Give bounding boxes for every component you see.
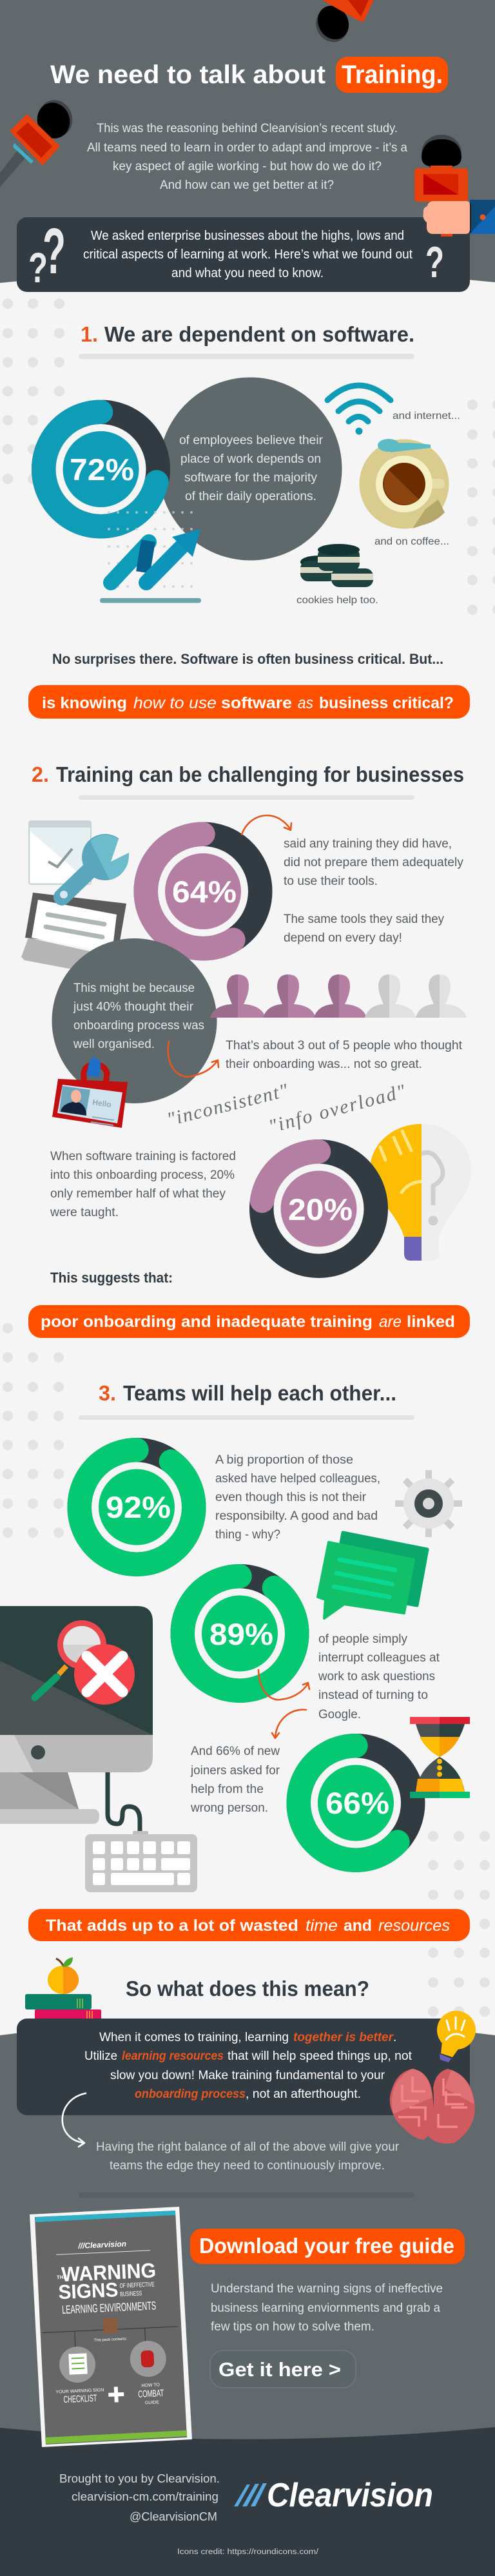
panel: conclusion box: . bbox=[393, 2031, 396, 2044]
heading: so what does this mean: So what does this mean? bbox=[126, 1977, 369, 2000]
text: software training onboarding: into this onboarding process, 20% bbox=[50, 1168, 235, 1182]
callout: business critical question: software bbox=[221, 694, 292, 712]
chart: 64% donut: 64% bbox=[172, 875, 237, 909]
handwritten quote: inconsistent: "inconsistent" bbox=[165, 1080, 290, 1130]
icon: right microphone held by hand bbox=[414, 135, 495, 237]
callout: download guide: Download your free guide bbox=[199, 2234, 454, 2258]
text: software training onboarding: only remember half of what they bbox=[50, 1187, 226, 1201]
text: training did not prepare: The same tools they said they bbox=[284, 913, 444, 926]
chart: 66% donut bbox=[286, 1734, 425, 1872]
text: interrupt colleagues: Google. bbox=[318, 1708, 361, 1721]
text: right balance: teams the edge they need to continuously improve. bbox=[110, 2159, 385, 2173]
heading: section 1: 1. bbox=[81, 322, 98, 346]
icon: top microphone bbox=[310, 0, 374, 48]
icon: folder with papers bbox=[21, 893, 126, 970]
button: get it here bbox=[210, 2350, 356, 2388]
chart: 72% donut bbox=[32, 400, 170, 539]
panel: onboarding circle: This might be because bbox=[73, 982, 195, 995]
icon: question mark right: ? bbox=[425, 238, 444, 287]
panel: onboarding circle: well organised. bbox=[73, 1038, 155, 1051]
icon: computer monitor bbox=[0, 1606, 153, 1824]
guide cover: SIGNS bbox=[58, 2278, 119, 2303]
text: right balance: Having the right balance of all of the above will give your bbox=[96, 2140, 400, 2154]
text: guide description bbox=[211, 2282, 443, 2334]
panel: employee description circle: software for the majority bbox=[184, 471, 317, 485]
chart: 64% donut bbox=[134, 822, 272, 960]
footer band bbox=[0, 2427, 495, 2576]
arrow: 89 donut to text bbox=[258, 1670, 309, 1700]
guide cover: GUIDE bbox=[145, 2400, 159, 2405]
heading: section 3: 3. bbox=[99, 1381, 116, 1405]
text: interrupt colleagues: instead of turning to bbox=[318, 1689, 428, 1702]
text: helped colleagues: even though this is not their bbox=[215, 1491, 367, 1504]
callout: download guide bbox=[190, 2229, 465, 2264]
icon: window with check bbox=[29, 821, 91, 884]
text: new joiners: wrong person. bbox=[190, 1801, 268, 1815]
text: icons credit: Icons credit: https://roundicons.com/ bbox=[177, 2548, 319, 2556]
guide cover: HOW TO bbox=[141, 2383, 160, 2388]
callout: business critical question: how to use bbox=[133, 694, 217, 712]
panel: survey intro box bbox=[17, 215, 470, 292]
chart: 89% donut: 89% bbox=[209, 1617, 273, 1651]
panel: conclusion box bbox=[17, 2019, 470, 2115]
text: guide description: Understand the warning signs of ineffective bbox=[211, 2282, 443, 2296]
text: interrupt colleagues bbox=[318, 1632, 440, 1721]
text: guide description: business learning enviornments and grab a bbox=[211, 2301, 440, 2315]
icon: growth arrow bbox=[100, 511, 201, 603]
text: three out of five: their onboarding was... not so great. bbox=[226, 1058, 422, 1071]
callout: onboarding and training linked bbox=[28, 1305, 470, 1338]
label: cookies help too: cookies help too. bbox=[296, 595, 378, 606]
callout: wasted time and resources: That adds up to a lot of wasted bbox=[46, 1917, 298, 1935]
icon: light bulb bbox=[370, 1124, 471, 1261]
panel: employee description circle bbox=[159, 378, 342, 561]
callout: onboarding and training linked: poor onboarding and inadequate training bbox=[41, 1313, 373, 1331]
footer text: Brought to you by Clearvision. bbox=[59, 2472, 220, 2485]
chart: 92% donut: 92% bbox=[106, 1490, 171, 1524]
box text bbox=[83, 229, 412, 280]
guide cover: OF INEFFECTIVE bbox=[119, 2281, 155, 2290]
text: guide description: few tips on how to solve them. bbox=[211, 2320, 374, 2334]
chart: 72% donut: 72% bbox=[70, 452, 134, 487]
text: helped colleagues: responsibilty. A good and bad bbox=[215, 1509, 378, 1523]
text: three out of five: That’s about 3 out of 5 people who thought bbox=[226, 1039, 463, 1052]
label: and on coffee: and on coffee... bbox=[374, 536, 449, 547]
text: interrupt colleagues: work to ask questions bbox=[318, 1670, 435, 1683]
panel: conclusion box: together is better bbox=[293, 2031, 394, 2044]
callout: wasted time and resources bbox=[28, 1909, 470, 1941]
text: helped colleagues bbox=[215, 1453, 380, 1542]
intro text: key aspect of agile working - but how do we do it? bbox=[113, 160, 382, 173]
background dots: section one right bbox=[467, 400, 495, 615]
guide cover: LEARNING ENVIRONMENTS bbox=[62, 2299, 157, 2316]
text: new joiners: And 66% of new bbox=[191, 1745, 280, 1758]
callout: business critical question: as bbox=[298, 694, 313, 712]
panel: conclusion box: , not an afterthought. bbox=[246, 2087, 361, 2101]
icon: wrench bbox=[60, 831, 135, 898]
text: training did not prepare: said any training they did have, bbox=[284, 837, 452, 851]
callout: onboarding and training linked: are bbox=[379, 1313, 402, 1331]
chart: 92% donut bbox=[67, 1438, 206, 1576]
intro text: This was the reasoning behind Clearvision’s recent study. bbox=[97, 122, 398, 135]
guide cover: YOUR WARNING SIGN bbox=[55, 2388, 104, 2395]
icon: apple on books bbox=[25, 1957, 101, 2022]
heading: section 2: 2. bbox=[32, 762, 49, 786]
background dots: section three left bbox=[3, 1323, 64, 1538]
text: software training onboarding bbox=[50, 1150, 236, 1219]
label: and internet: and internet... bbox=[393, 411, 460, 421]
arrow: white curved bbox=[63, 2093, 86, 2147]
arrow: donut to training text bbox=[242, 815, 291, 835]
icon: coffee cup bbox=[360, 439, 449, 528]
text: right balance bbox=[96, 2140, 400, 2173]
text: new joiners: help from the bbox=[191, 1783, 264, 1796]
guide cover: WARNING bbox=[61, 2258, 157, 2286]
chart: 89% donut bbox=[170, 1564, 309, 1703]
text: training did not prepare bbox=[284, 837, 463, 945]
text: training did not prepare: depend on every day! bbox=[284, 931, 402, 945]
text: new joiners bbox=[190, 1745, 280, 1815]
box text: and what you need to know. bbox=[171, 266, 324, 280]
footer text: @ClearvisionCM bbox=[130, 2510, 217, 2523]
icon: question marks left: ? bbox=[28, 244, 48, 291]
text: helped colleagues: thing - why? bbox=[215, 1528, 280, 1542]
panel: conclusion box: that will help speed things up, not bbox=[228, 2049, 412, 2063]
statement: this suggests that: This suggests that: bbox=[50, 1270, 173, 1286]
title highlight: Training: Training. bbox=[342, 61, 443, 89]
guide cover: BUSINESS bbox=[120, 2290, 142, 2298]
panel: onboarding circle bbox=[52, 938, 217, 1103]
icon: keyboard bbox=[85, 1772, 197, 1892]
callout: wasted time and resources: and bbox=[344, 1917, 372, 1935]
callout: business critical question: business critical? bbox=[319, 694, 454, 712]
text: training did not prepare: did not prepare them adequately bbox=[284, 856, 463, 869]
heading: section 1: We are dependent on software. bbox=[104, 322, 414, 346]
icon: cookies bbox=[300, 544, 373, 587]
heading: section 2: Training can be challenging for businesses bbox=[56, 762, 464, 786]
heading: section 1 bbox=[79, 322, 414, 359]
intro text bbox=[87, 122, 407, 192]
handwritten quote: info overload: "info overload" bbox=[266, 1080, 408, 1138]
icon: left microphone bbox=[0, 95, 77, 187]
chart: 20% donut bbox=[249, 1139, 388, 1278]
intro text: All teams need to learn in order to adapt and improve - it’s a bbox=[87, 141, 407, 155]
title: We need to talk about bbox=[50, 61, 325, 89]
callout: business critical question bbox=[28, 685, 470, 719]
callout: business critical question: is knowing bbox=[42, 694, 127, 712]
intro text: And how can we get better at it? bbox=[160, 179, 334, 192]
icon: hourglass bbox=[410, 1717, 470, 1798]
text: interrupt colleagues: of people simply bbox=[318, 1632, 408, 1646]
text: software training onboarding: When software training is factored bbox=[50, 1150, 236, 1163]
icon: question marks left bbox=[28, 215, 66, 291]
footer section background bbox=[0, 2020, 495, 2576]
text: software training onboarding: were taught. bbox=[50, 1206, 119, 1219]
icon: small light bulb bbox=[437, 2011, 476, 2062]
icon: question marks left: ? bbox=[43, 215, 66, 287]
text: helped colleagues: A big proportion of those bbox=[215, 1453, 353, 1467]
callout: wasted time and resources: time bbox=[306, 1917, 338, 1935]
panel: employee description circle: place of work depends on bbox=[180, 452, 321, 466]
footer text bbox=[59, 2472, 220, 2523]
panel: employee description circle: of employees believe their bbox=[179, 434, 324, 447]
box text: critical aspects of learning at work. Here’s what we found out bbox=[83, 247, 412, 262]
icon: brain bbox=[390, 2069, 475, 2144]
text: training did not prepare: to use their tools. bbox=[284, 875, 378, 888]
footer text: clearvision-cm.com/training bbox=[72, 2490, 218, 2503]
panel: onboarding circle: onboarding process was bbox=[73, 1019, 204, 1032]
guide cover: THE bbox=[57, 2274, 68, 2280]
title bbox=[50, 57, 448, 93]
panel: conclusion box: When it comes to training, learning bbox=[99, 2031, 289, 2044]
guide cover bbox=[30, 2207, 192, 2447]
text: three out of five bbox=[226, 1039, 463, 1071]
icon: gear bbox=[395, 1470, 462, 1537]
background dots: section one left bbox=[3, 298, 64, 484]
arrow: google to 66 bbox=[272, 1710, 306, 1738]
chart: 66% donut: 66% bbox=[325, 1786, 389, 1820]
guide cover: This pack contains: bbox=[94, 2338, 128, 2343]
box text: We asked enterprise businesses about the highs, lows and bbox=[91, 229, 404, 243]
background dots: section three right bbox=[428, 1831, 490, 2017]
callout: wasted time and resources: resources bbox=[378, 1917, 450, 1935]
guide cover: CHECKLIST bbox=[63, 2393, 97, 2405]
guide cover: COMBAT bbox=[138, 2388, 164, 2400]
button: get it here: Get it here > bbox=[218, 2358, 341, 2381]
guide cover: ///Clearvision bbox=[77, 2239, 126, 2251]
header background bbox=[0, 0, 495, 283]
text: helped colleagues: asked have helped colleagues, bbox=[215, 1472, 380, 1486]
arrow: circle to three out of five bbox=[168, 1041, 218, 1077]
callout: onboarding and training linked: linked bbox=[407, 1313, 455, 1331]
icon: id badge bbox=[52, 1057, 128, 1128]
logo: Clearvision: Clearvision bbox=[267, 2477, 433, 2514]
chart: 20% donut: 20% bbox=[288, 1192, 353, 1226]
icon: id badge: Hello bbox=[92, 1098, 112, 1109]
heading: section 2 bbox=[32, 762, 464, 800]
panel: conclusion box: slow you down! Make training fundamental to your bbox=[110, 2069, 385, 2082]
panel: conclusion box: Utilize bbox=[84, 2049, 117, 2063]
icon: search error bbox=[35, 1620, 135, 1705]
text: interrupt colleagues: interrupt colleagues at bbox=[318, 1651, 440, 1665]
panel: onboarding circle: just 40% thought their bbox=[73, 1000, 194, 1014]
panel: employee description circle: of their daily operations. bbox=[185, 490, 316, 503]
icon: chat bubble bbox=[318, 1533, 427, 1618]
statement: no surprises: No surprises there. Software is often business critical. But... bbox=[52, 651, 443, 667]
icon: wifi bbox=[327, 385, 391, 434]
text: new joiners: joiners asked for bbox=[190, 1764, 280, 1777]
panel: conclusion box: learning resources bbox=[122, 2049, 224, 2063]
heading: section 3 bbox=[79, 1381, 414, 1420]
panel: conclusion box: onboarding process bbox=[135, 2087, 246, 2101]
heading: section 3: Teams will help each other... bbox=[123, 1381, 396, 1405]
chart: people 3 of 5 bbox=[210, 974, 467, 1018]
